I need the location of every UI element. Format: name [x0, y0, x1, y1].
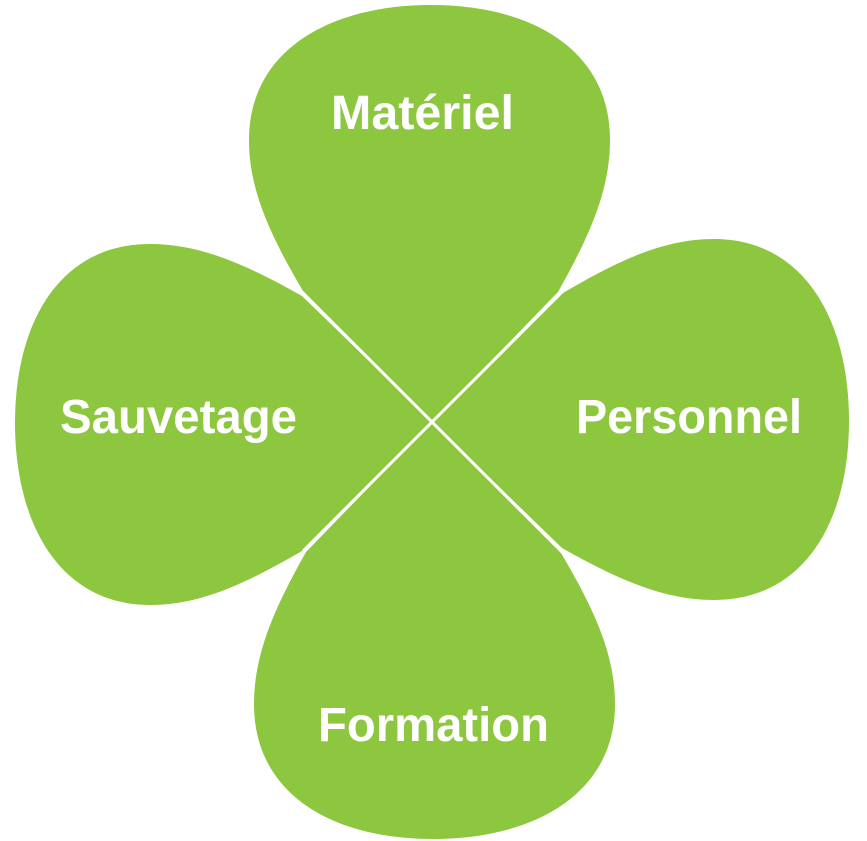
petal: Personnel — [432, 239, 849, 600]
petal: Sauvetage — [15, 244, 432, 605]
label: Formation: Formation — [318, 699, 549, 752]
label: Matériel: Matériel — [331, 87, 514, 140]
label: Personnel: Personnel — [576, 391, 802, 444]
petal: Matériel — [249, 5, 610, 422]
petal: Formation — [254, 422, 615, 839]
label: Sauvetage: Sauvetage — [60, 391, 297, 444]
